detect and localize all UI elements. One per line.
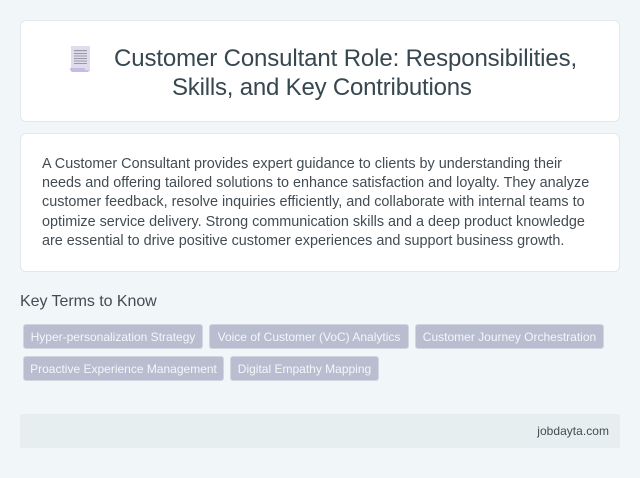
intro paragraph: customer feedback, resolve inquiries efficiently, and collaborate with internal teams to bbox=[42, 194, 585, 210]
tag bbox=[230, 356, 379, 381]
icon: document scroll bbox=[70, 46, 90, 72]
tag: Digital Empathy Mapping bbox=[238, 362, 371, 376]
intro paragraph: are essential to drive positive customer experiences and support business growth. bbox=[42, 233, 564, 249]
tag: Proactive Experience Management bbox=[30, 362, 217, 376]
footer source: jobdayta.com bbox=[537, 424, 609, 438]
tag: Voice of Customer (VoC) Analytics bbox=[218, 330, 400, 344]
intro paragraph bbox=[42, 156, 589, 249]
intro paragraph: needs and offering tailored solutions to enhance satisfaction and loyalty. They analyze bbox=[42, 175, 589, 191]
intro paragraph: A Customer Consultant provides expert guidance to clients by understanding their bbox=[42, 156, 562, 172]
tag: Customer Journey Orchestration bbox=[423, 330, 596, 344]
key term tags bbox=[23, 324, 604, 381]
section heading: Key Terms to Know bbox=[20, 293, 157, 310]
tag: Hyper-personalization Strategy bbox=[31, 330, 195, 344]
footer bar bbox=[20, 414, 620, 448]
title line 2: Skills, and Key Contributions bbox=[172, 74, 472, 101]
title card bbox=[20, 20, 620, 122]
tag bbox=[209, 324, 409, 349]
title line 1: Customer Consultant Role: Responsibilities, bbox=[114, 45, 577, 72]
intro card bbox=[20, 133, 620, 272]
intro paragraph: optimize service delivery. Strong communication skills and a deep product knowledge bbox=[42, 214, 585, 230]
tag bbox=[415, 324, 604, 349]
tag bbox=[23, 324, 203, 349]
tag bbox=[23, 356, 224, 381]
